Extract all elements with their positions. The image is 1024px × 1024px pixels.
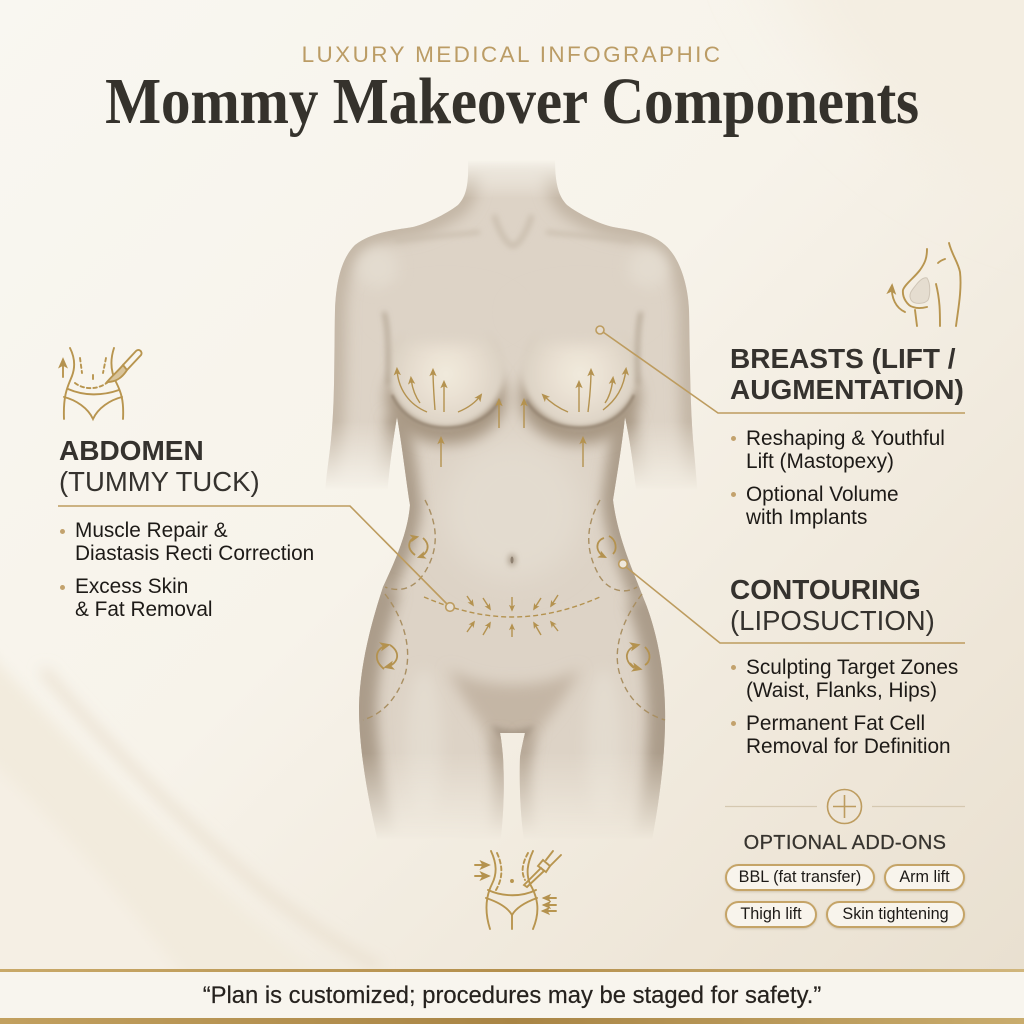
central highlights xyxy=(463,460,563,559)
pill: skin tightening: Skin tightening xyxy=(842,905,949,923)
heading: abdomen: ABDOMEN xyxy=(59,435,204,466)
lift arrows: chest xyxy=(397,369,626,467)
collarbones and neck xyxy=(431,230,479,238)
liposuction zones: dashed outlines xyxy=(363,500,665,720)
footer quote: “Plan is customized; procedures may be staged for safety.” xyxy=(203,982,821,1009)
upper blend over chest xyxy=(374,282,518,342)
icon: waist with cannula xyxy=(475,851,561,929)
bullets: contouring: Permanent Fat Cell xyxy=(746,712,925,735)
crease lines xyxy=(392,395,500,428)
heading: optional add-ons: OPTIONAL ADD-ONS xyxy=(744,832,946,854)
bullets: abdomen: Excess Skin xyxy=(75,575,188,598)
pill: arm lift: Arm lift xyxy=(899,868,950,886)
bullets: breasts: with Implants xyxy=(746,506,867,529)
panel: optional add-ons xyxy=(724,788,966,930)
heading: breasts xyxy=(730,343,964,405)
title: Mommy Makeover Components xyxy=(105,65,919,138)
bullets: contouring: Sculpting Target Zones xyxy=(746,656,958,679)
hip shading xyxy=(359,587,383,850)
leader line: breasts xyxy=(596,326,965,413)
bullets: abdomen: Diastasis Recti Correction xyxy=(75,542,314,565)
heading: breasts: BREASTS (LIFT / xyxy=(730,343,956,374)
panel: breasts xyxy=(730,343,964,529)
bullets: contouring: Removal for Definition xyxy=(746,735,951,758)
bullets: abdomen xyxy=(60,519,314,621)
pelvic shading xyxy=(450,670,578,732)
torso side shading xyxy=(383,417,410,587)
eyebrow heading: LUXURY MEDICAL INFOGRAPHIC xyxy=(302,42,722,67)
heading: breasts: AUGMENTATION) xyxy=(730,374,964,405)
tummy tuck incision with arrows xyxy=(424,595,600,637)
bullets: abdomen: & Fat Removal xyxy=(75,598,213,621)
rotation arrows: liposuction zones xyxy=(377,536,650,669)
pill: thigh lift: Thigh lift xyxy=(740,905,802,923)
bullets: breasts: Optional Volume xyxy=(746,483,899,506)
shoulder and arm highlights xyxy=(357,246,387,277)
leader line: contouring xyxy=(619,560,965,643)
edge shading xyxy=(328,170,696,797)
bullets: abdomen: Muscle Repair & xyxy=(75,519,228,542)
bullets: breasts: Lift (Mastopexy) xyxy=(746,450,894,473)
figure: anatomical mannequin xyxy=(326,164,696,832)
pill: arm lift xyxy=(884,864,965,891)
pill: thigh lift xyxy=(725,901,817,928)
leader line: abdomen xyxy=(58,506,454,611)
thigh inner shadows xyxy=(498,735,504,830)
underarm creases xyxy=(384,312,388,385)
bullets: contouring: (Waist, Flanks, Hips) xyxy=(746,679,937,702)
under-chest shadow volumes xyxy=(386,352,506,444)
pill: BBL: BBL (fat transfer) xyxy=(739,868,861,886)
heading: contouring: CONTOURING xyxy=(730,574,921,605)
bullets: breasts xyxy=(731,427,945,529)
panel: contouring xyxy=(730,574,958,758)
bullets: contouring xyxy=(731,656,958,758)
footer band xyxy=(0,969,1024,1024)
subheading: liposuction: (LIPOSUCTION) xyxy=(730,605,935,636)
pill: skin tightening xyxy=(826,901,965,928)
icon: abdomen with scalpel xyxy=(63,348,142,419)
soft chest forms xyxy=(388,342,504,428)
bullets: breasts: Reshaping & Youthful xyxy=(746,427,945,450)
icon: plus in circle xyxy=(725,788,965,824)
pill: BBL xyxy=(725,864,875,891)
navel xyxy=(508,554,516,566)
panel: abdomen xyxy=(59,435,314,621)
subheading: tummy tuck: (TUMMY TUCK) xyxy=(59,466,260,497)
icon: breast implant profile xyxy=(892,243,961,326)
